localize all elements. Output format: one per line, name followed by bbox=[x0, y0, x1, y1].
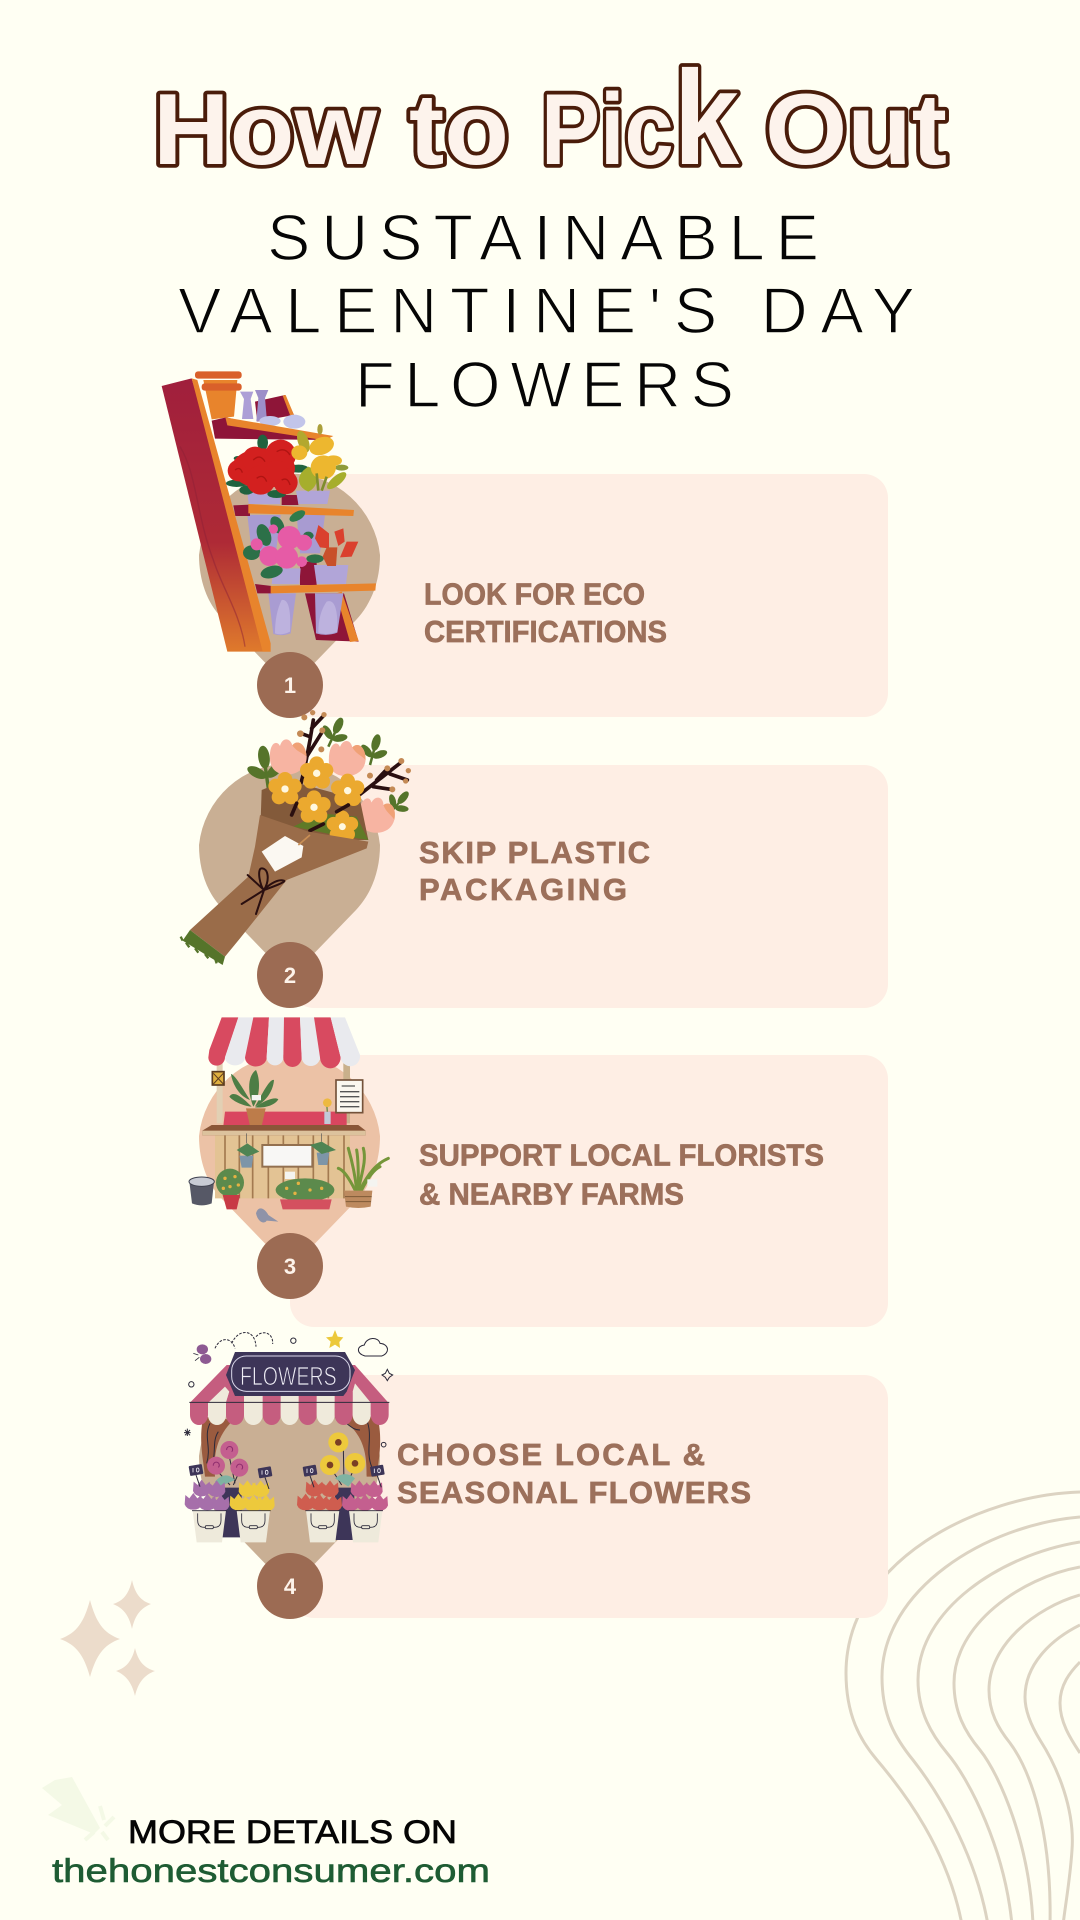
icon: sparkles bbox=[60, 1580, 155, 1696]
step 1 label: CERTIFICATIONS bbox=[424, 614, 667, 649]
illustration: flower shelf bbox=[162, 371, 376, 652]
step 4 label: CHOOSE LOCAL & bbox=[397, 1437, 705, 1472]
step 4 label bbox=[397, 1437, 751, 1510]
badge 2: 2 bbox=[284, 963, 296, 988]
badge 4: 4 bbox=[284, 1574, 297, 1599]
illustration: wrapped bouquet bbox=[181, 710, 418, 965]
badge 3 bbox=[257, 1233, 323, 1299]
panel: step 4 card bbox=[290, 1375, 888, 1618]
step 4 label: SEASONAL FLOWERS bbox=[397, 1475, 751, 1510]
subtitle: SUSTAINABLE bbox=[267, 201, 819, 274]
panel: step 3 card bbox=[290, 1055, 888, 1327]
badge 1 bbox=[257, 652, 323, 718]
illustration: flower shop: FLOWERS bbox=[240, 1361, 337, 1391]
step 1 label bbox=[424, 576, 667, 649]
step 3 label: SUPPORT LOCAL FLORISTS bbox=[419, 1138, 824, 1172]
right flower bunch bbox=[297, 1432, 388, 1542]
icon: faded leaf bbox=[42, 1777, 114, 1840]
title: Pick bbox=[541, 44, 739, 193]
title: Out bbox=[765, 74, 947, 186]
left flower bunch bbox=[185, 1441, 275, 1542]
footer: more details: MORE DETAILS ON bbox=[128, 1814, 457, 1850]
title: How bbox=[153, 74, 377, 186]
step 2 label: SKIP PLASTIC bbox=[419, 835, 650, 870]
title: to bbox=[409, 74, 509, 186]
panel: step 1 card bbox=[290, 474, 888, 717]
decorative contour lines bbox=[846, 1492, 1080, 1920]
panel: step 2 card bbox=[290, 765, 888, 1008]
badge 1: 1 bbox=[284, 673, 296, 698]
footer: website: thehonestconsumer.com bbox=[52, 1852, 490, 1889]
teardrop marker 2 bbox=[199, 764, 380, 968]
badge 2 bbox=[257, 942, 323, 1008]
subtitle bbox=[178, 201, 915, 421]
badge 4 bbox=[257, 1553, 323, 1619]
teardrop marker 4 bbox=[199, 1375, 380, 1579]
step 3 label: & NEARBY FARMS bbox=[419, 1176, 684, 1212]
title bbox=[153, 44, 947, 193]
teardrop marker 1 bbox=[199, 474, 380, 678]
step 2 label: PACKAGING bbox=[419, 872, 627, 907]
teardrop marker 3 bbox=[199, 1055, 380, 1259]
badge 3: 3 bbox=[284, 1254, 296, 1279]
step 3 label bbox=[419, 1138, 824, 1212]
illustration: flower shop bbox=[184, 1330, 393, 1542]
step 1 label: LOOK FOR ECO bbox=[424, 576, 645, 612]
subtitle: FLOWERS bbox=[355, 348, 734, 421]
illustration: market stall bbox=[189, 1017, 388, 1222]
subtitle: VALENTINE'S DAY bbox=[178, 274, 915, 347]
step 2 label bbox=[419, 835, 650, 907]
